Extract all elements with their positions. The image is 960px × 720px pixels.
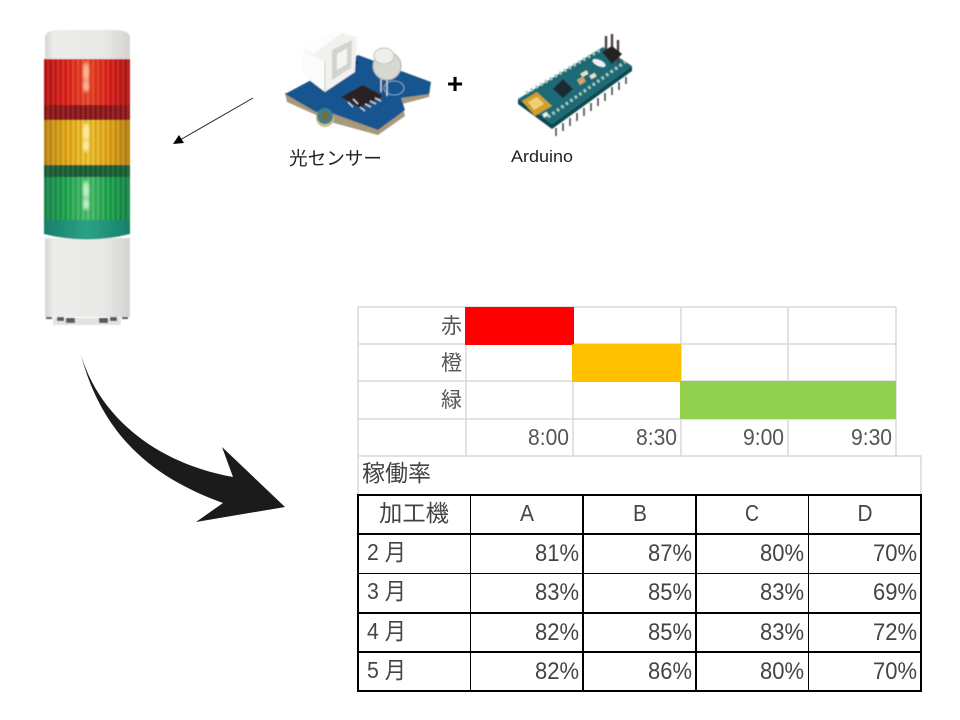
table title: operating rate: 稼働率	[362, 460, 431, 486]
rate values: 70%	[873, 540, 917, 567]
icon: signal tower light	[44, 30, 130, 325]
chart: tower light status timeline	[358, 307, 896, 456]
time axis labels: 8:00	[528, 424, 569, 450]
table header: B	[633, 500, 647, 526]
rate values: 82%	[535, 619, 579, 646]
arrow: tower light to charts	[81, 355, 285, 522]
month labels: 3 月	[367, 578, 406, 604]
time axis labels: 9:00	[743, 424, 784, 450]
rate values: 69%	[873, 579, 917, 606]
rate values: 82%	[535, 658, 579, 685]
rate values: 72%	[873, 619, 917, 646]
rate values: 87%	[648, 540, 692, 567]
table header: C	[745, 500, 759, 526]
rate values: 85%	[648, 619, 692, 646]
label: light sensor: 光センサー	[289, 148, 382, 169]
rate values: 70%	[873, 658, 917, 685]
row labels: 橙	[441, 352, 462, 375]
rate values: 80%	[760, 658, 804, 685]
month labels: 5 月	[367, 657, 406, 683]
table header	[379, 500, 872, 526]
table title: operating rate	[358, 456, 921, 495]
rate values: 85%	[648, 579, 692, 606]
rate values: 83%	[760, 619, 804, 646]
plus sign: +	[447, 68, 463, 99]
row labels	[441, 315, 462, 412]
month labels: 2 月	[367, 539, 406, 565]
month labels: 4 月	[367, 618, 406, 644]
orange status bar	[572, 344, 681, 382]
icon: light sensor board	[285, 30, 431, 135]
rate values: 86%	[648, 658, 692, 685]
icon: Arduino board	[518, 34, 632, 136]
rate values: 83%	[760, 579, 804, 606]
row labels: 赤	[441, 315, 462, 338]
rate values: 83%	[535, 579, 579, 606]
label: Arduino: Arduino	[511, 147, 573, 166]
time axis labels: 9:30	[851, 424, 892, 450]
month labels	[367, 539, 406, 683]
arrow: sensor to tower light	[173, 98, 253, 144]
rate values: 81%	[535, 540, 579, 567]
time axis labels	[528, 424, 892, 450]
red status bar	[465, 307, 574, 345]
table header: 加工機	[379, 500, 449, 526]
table header: D	[858, 500, 872, 526]
green status bar	[680, 381, 896, 419]
row labels: 緑	[441, 389, 462, 412]
time axis labels: 8:30	[636, 424, 677, 450]
rate values: 80%	[760, 540, 804, 567]
table header: A	[520, 500, 535, 526]
table: monthly operating rate by machine	[358, 495, 921, 691]
rate values	[535, 540, 917, 685]
